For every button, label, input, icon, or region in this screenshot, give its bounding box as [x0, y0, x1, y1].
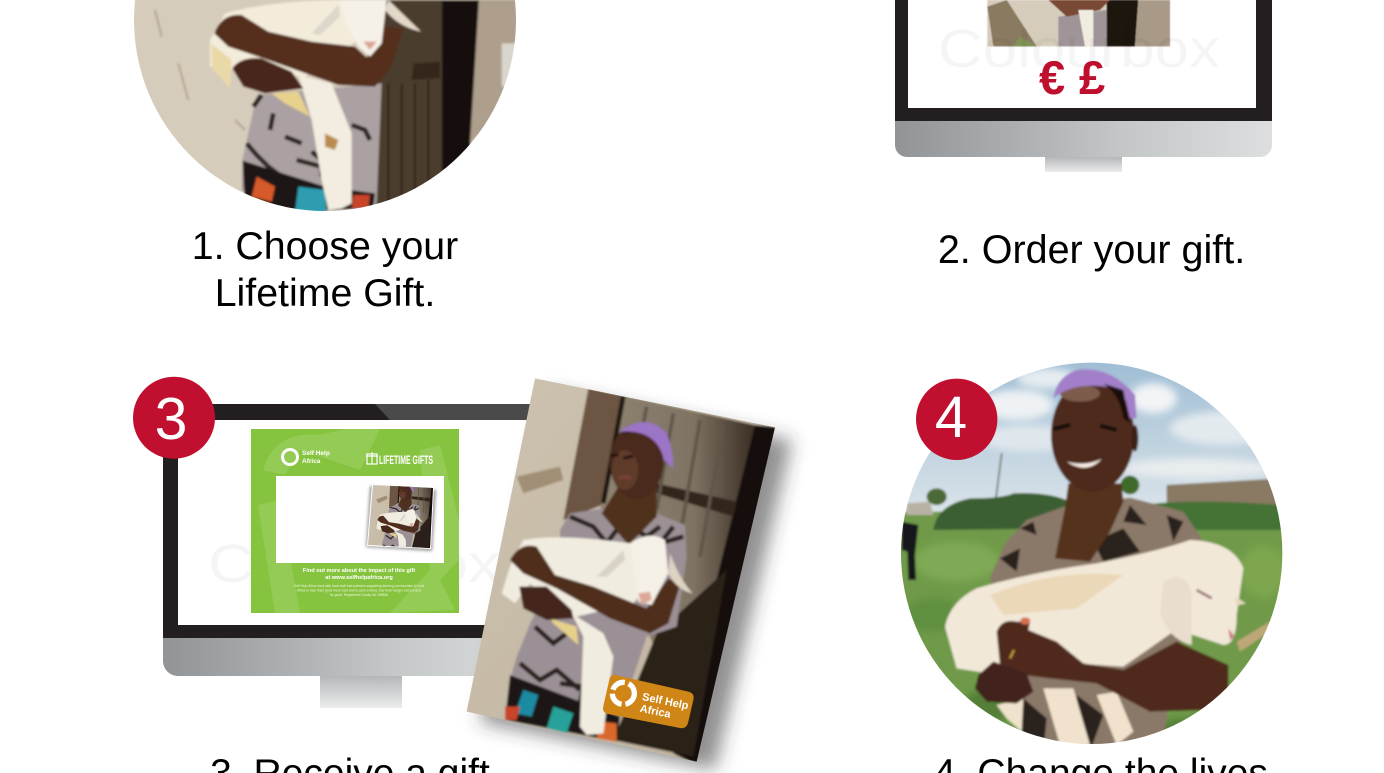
poster with shadow: [466, 378, 802, 773]
watermark: Colourbox: [938, 19, 1220, 79]
card white panel: [276, 476, 444, 563]
watermark: Colourbox: [208, 534, 500, 594]
step 1 panel: [125, 0, 525, 315]
currency symbols: €: [1039, 51, 1065, 104]
poster logo: [603, 675, 694, 728]
goat: [945, 540, 1243, 675]
order photo: [987, 0, 1170, 46]
card small print 3: for good. Registered Charity No 298830: [330, 593, 388, 597]
step 3 badge: [133, 377, 215, 459]
step 4 badge: 4: [935, 385, 967, 450]
card text: Find out more about the impact of this gift: [303, 568, 415, 574]
arms: [214, 15, 403, 87]
dress: [990, 498, 1202, 755]
card logo text line 2: Africa: [302, 458, 321, 465]
step 2 monitor: [895, 0, 1272, 172]
step 4 panel: [890, 355, 1290, 773]
step 1 caption line 2: Lifetime Gift.: [215, 271, 435, 315]
card small print 2: Africa to help them grow more food and to earn a living, free from hunger and poverty: [297, 588, 422, 592]
green gift card: [251, 429, 462, 613]
goat body and legs: [210, 0, 358, 77]
step 4 photo circle: [890, 355, 1290, 755]
monitor stand: [1045, 157, 1122, 172]
step 1 caption: 1. Choose your: [192, 224, 458, 268]
card small print: Self Help Africa work with local staff and partners supporting farming communities in rural: [294, 584, 424, 588]
cow: [902, 522, 918, 580]
hands and arms: [997, 621, 1228, 712]
step 2 panel: [895, 0, 1272, 272]
step 3 panel: [133, 353, 827, 773]
step 3 monitor: [163, 404, 541, 708]
step 3 badge: 3: [155, 386, 187, 452]
monitor stand: [320, 676, 402, 708]
card logo: [282, 450, 298, 464]
pound symbol: £: [1079, 51, 1105, 104]
goat head: [340, 0, 387, 57]
poster logo: Africa: [639, 703, 673, 721]
step 4 badge: [916, 379, 997, 460]
poster logo: Self Help: [641, 691, 690, 712]
gift icon: [366, 452, 378, 464]
step 1 photo circle: [125, 0, 525, 213]
step 2 caption: 2. Order your gift.: [938, 228, 1245, 272]
card url: at www.selfhelpafrica.org: [325, 575, 393, 581]
neck and head: [1055, 483, 1123, 562]
card thumbnail: [364, 484, 438, 553]
lifetime gifts label: LIFETIME GIFTS: [379, 453, 433, 467]
card logo text: Self Help: [302, 450, 330, 457]
